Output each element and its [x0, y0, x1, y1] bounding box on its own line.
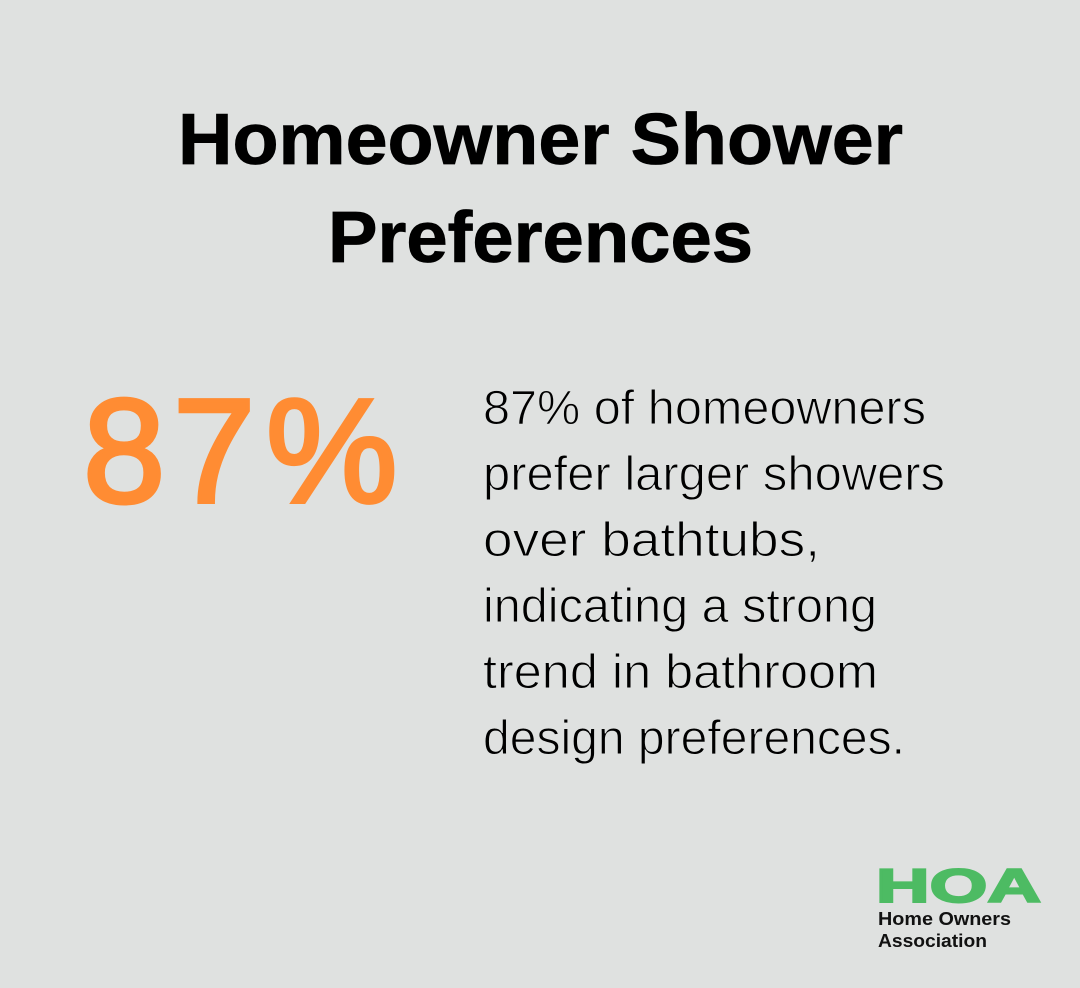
title: Preferences — [328, 198, 753, 278]
logo: HOA Home Owners Association: Home Owners — [878, 909, 1011, 929]
logo: HOA Home Owners Association: HOA — [876, 859, 1041, 912]
big statistic: 87%: 87% — [83, 369, 398, 534]
description text: indicating a strong — [483, 580, 877, 633]
logo: HOA Home Owners Association: Association — [878, 931, 987, 951]
title: Homeowner Shower — [178, 100, 903, 180]
description text: prefer larger showers — [483, 448, 945, 501]
description text: 87% of homeowners — [483, 382, 926, 435]
description text: over bathtubs, — [483, 514, 820, 567]
title — [178, 100, 903, 278]
description text: trend in bathroom — [483, 646, 878, 699]
description text — [483, 382, 945, 765]
logo: HOA Home Owners Association — [876, 859, 1041, 951]
description text: design preferences. — [483, 712, 905, 765]
